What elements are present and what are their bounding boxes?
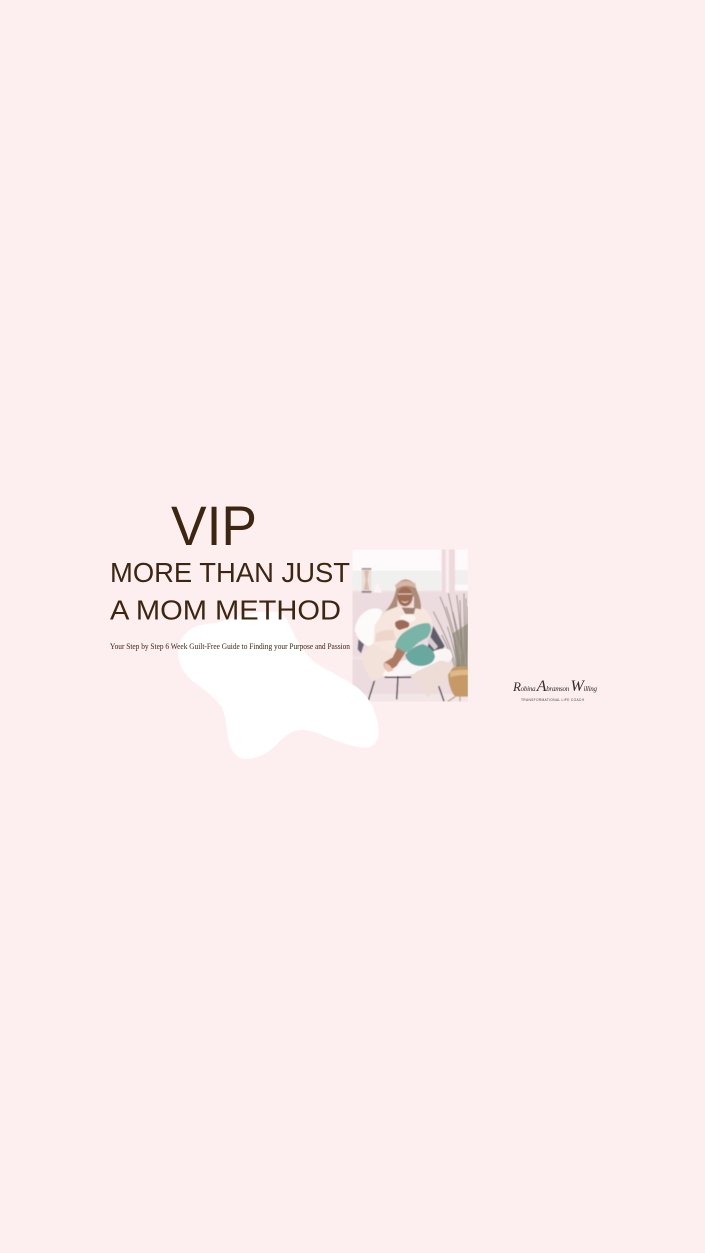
fur seat xyxy=(380,648,452,676)
white blob shape xyxy=(178,612,379,759)
hourglass xyxy=(362,568,371,593)
title: VIP: VIP xyxy=(171,494,257,557)
cardigan body xyxy=(374,606,432,648)
signature logo xyxy=(512,678,598,702)
hair and headband xyxy=(385,579,421,611)
fur throw left xyxy=(355,608,383,647)
photo: woman sitting in chair with mug xyxy=(352,549,468,702)
mug and hands xyxy=(400,614,416,622)
chair back and legs xyxy=(358,639,364,653)
signature name: Robina Abramson Willing xyxy=(512,678,598,695)
pot xyxy=(448,666,468,697)
logo tagline: TRANSFORMATIONAL LIFE COACH xyxy=(521,698,585,702)
teal jeans xyxy=(395,623,431,653)
lower leg and foot xyxy=(384,647,405,672)
plant xyxy=(433,593,468,668)
face xyxy=(397,587,413,606)
heading line: MORE THAN JUST: MORE THAN JUST xyxy=(110,557,350,588)
blanket xyxy=(362,644,392,682)
heading line: A MOM METHOD: A MOM METHOD xyxy=(110,594,341,626)
infographic canvas xyxy=(110,506,597,759)
subtitle: Your Step by Step 6 Week Guilt-Free Guide to Finding your Purpose and Passion xyxy=(110,642,351,651)
